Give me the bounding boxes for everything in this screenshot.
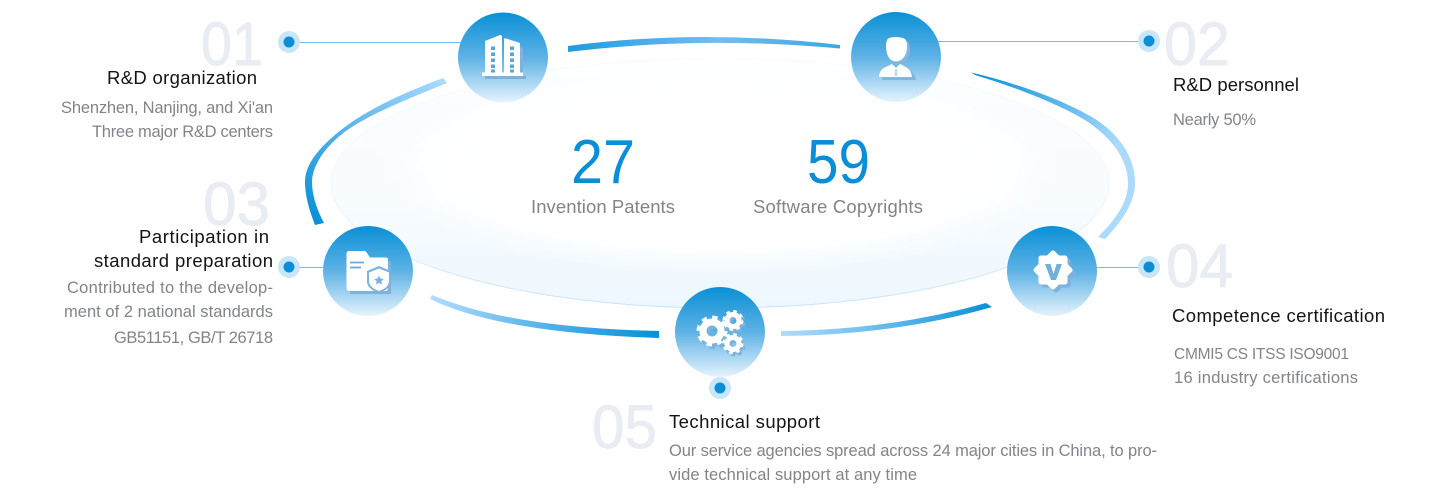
panel: 04 Competence certification — [1007, 226, 1385, 387]
heading 03 — [94, 226, 273, 271]
icon: V badge — [1007, 226, 1097, 316]
body text 05: vide technical support at any time — [669, 466, 917, 484]
connector 02 — [938, 40, 1149, 42]
statistic: invention patents — [531, 128, 675, 217]
statistic: software copyrights — [753, 128, 923, 217]
statistic: software copyrights: Software Copyrights — [753, 196, 923, 217]
number 03: 03 — [203, 170, 270, 238]
body text 01: Three major R&D centers — [92, 123, 273, 141]
body text 03: Contributed to the develop- — [67, 279, 273, 297]
body text 03: ment of 2 national standards — [64, 303, 273, 321]
connector 04 — [1096, 266, 1149, 268]
panel: 01 R&D organization — [61, 10, 548, 141]
panel: 05 Technical support — [592, 287, 1157, 484]
marker dot 02 — [1138, 30, 1160, 52]
icon: office building — [458, 12, 548, 102]
central glowing ellipse — [331, 58, 1109, 308]
body text 03 — [64, 279, 273, 347]
body text 04 — [1174, 346, 1358, 387]
body text 01: Shenzhen, Nanjing, and Xi'an — [61, 99, 273, 117]
body text 04: 16 industry certifications — [1174, 369, 1358, 387]
number 04: 04 — [1166, 232, 1233, 300]
icon: folder with shield — [323, 226, 413, 316]
connector 03 — [289, 266, 326, 268]
marker dot 05 — [709, 377, 731, 399]
panel: 03 Participation in standard preparation — [64, 170, 413, 347]
number 05: 05 — [592, 393, 657, 461]
statistic: software copyrights: 59 — [807, 128, 870, 197]
orbit ring arcs — [305, 37, 1135, 338]
body text 04: CMMI5 CS ITSS ISO9001 — [1174, 346, 1349, 363]
heading 05: Technical support — [669, 411, 820, 432]
heading 03: standard preparation — [94, 250, 273, 271]
marker dot 03 — [278, 256, 300, 278]
icon: person — [851, 12, 941, 102]
statistic: invention patents: 27 — [571, 128, 635, 197]
heading 02: R&D personnel — [1173, 74, 1299, 95]
heading 01: R&D organization — [107, 67, 257, 88]
number 02: 02 — [1164, 10, 1230, 78]
body text 01 — [61, 99, 273, 141]
body text 03: GB51151, GB/T 26718 — [114, 329, 273, 347]
panel: 02 R&D personnel — [851, 10, 1299, 129]
body text 02: Nearly 50% — [1173, 111, 1256, 129]
heading 03: Participation in — [139, 226, 269, 247]
icon: gears — [675, 287, 765, 377]
heading 04: Competence certification — [1172, 305, 1385, 326]
statistic: invention patents: Invention Patents — [531, 196, 675, 217]
body text 05 — [669, 442, 1157, 484]
marker dot 01 — [278, 31, 300, 53]
marker dot 04 — [1138, 256, 1160, 278]
connector 01 — [289, 42, 462, 44]
body text 05: Our service agencies spread across 24 major cities in China, to pro- — [669, 442, 1157, 460]
number 01: 01 — [201, 10, 263, 78]
